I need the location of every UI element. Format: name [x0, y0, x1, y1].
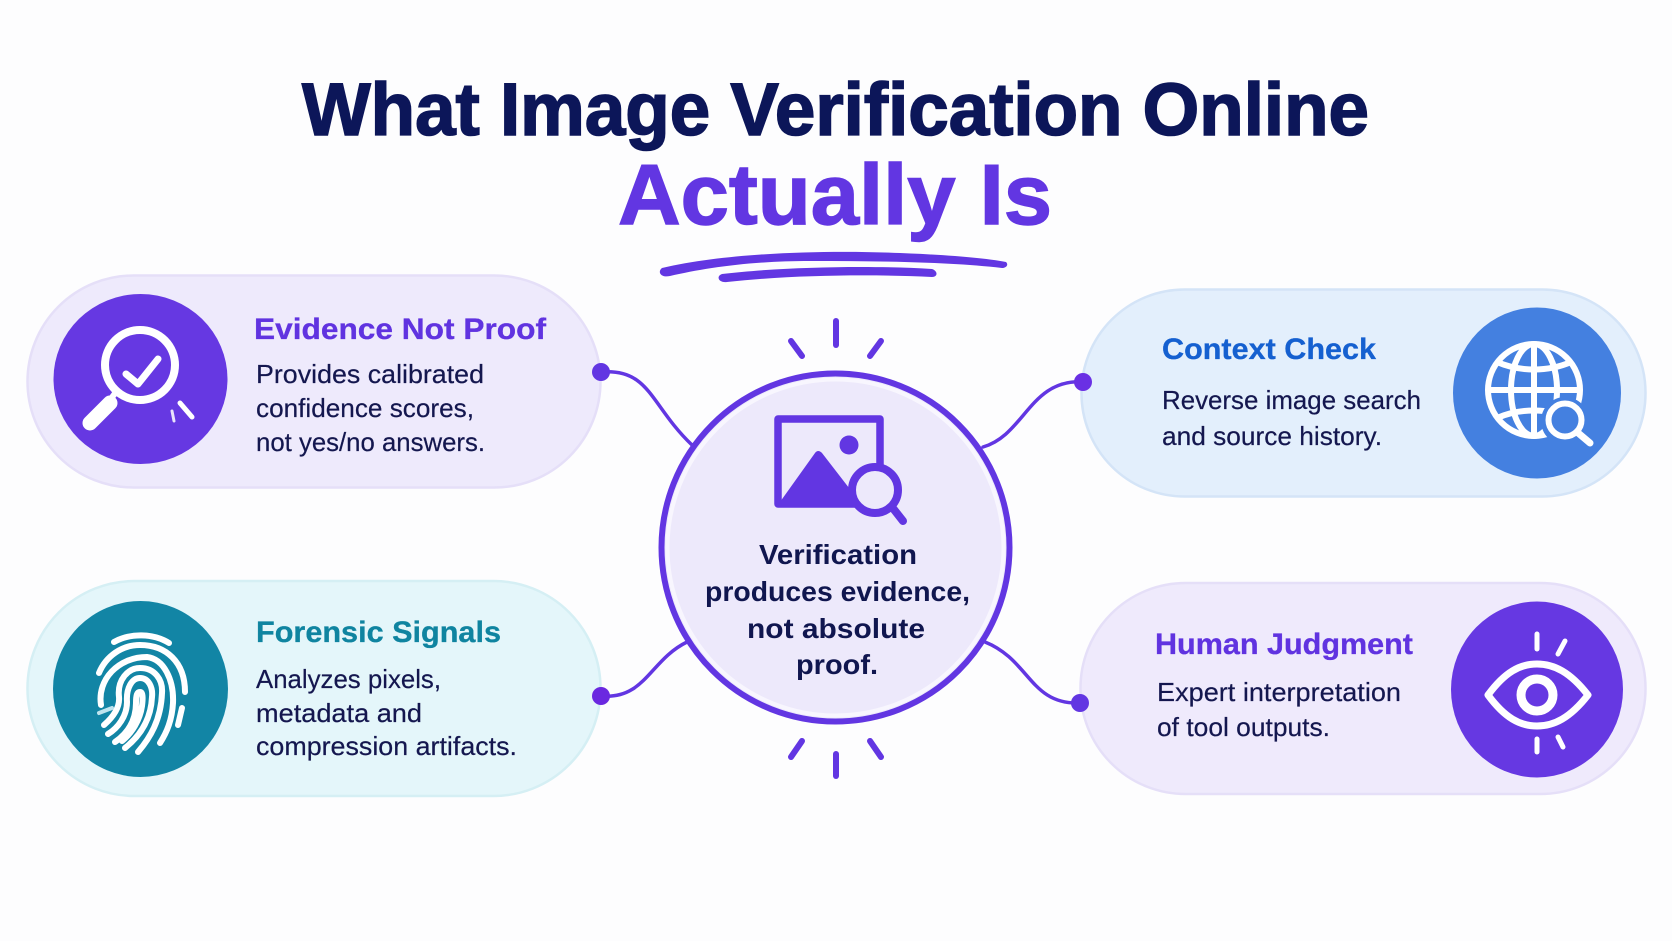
heading: Context Check — [1162, 333, 1376, 366]
title underline — [660, 252, 1007, 282]
hub text: produces evidence, — [705, 576, 970, 607]
panel: evidence not proof — [28, 276, 610, 488]
connector dot — [592, 363, 610, 381]
body text: and source history. — [1162, 421, 1382, 451]
panel: forensic signals — [28, 581, 610, 796]
body text — [1162, 385, 1421, 451]
body text: Provides calibrated — [256, 359, 484, 389]
title — [302, 68, 1369, 282]
body text: compression artifacts. — [256, 731, 517, 761]
hub text: not absolute — [747, 613, 925, 644]
hub text — [705, 539, 970, 680]
connectors — [601, 372, 1084, 703]
central hub — [662, 374, 1010, 722]
icon: eye — [1451, 602, 1623, 778]
title line 2: Actually Is — [618, 148, 1052, 243]
body text: not yes/no answers. — [256, 427, 485, 457]
connector dot — [592, 687, 610, 705]
body text — [1157, 677, 1401, 742]
panel: human judgment — [1071, 583, 1646, 794]
burst rays — [791, 321, 881, 776]
icon: image with magnifier — [778, 419, 903, 521]
hub text: Verification — [759, 539, 917, 570]
connector dot — [1074, 373, 1092, 391]
icon: globe with magnifier — [1453, 308, 1621, 478]
body text — [256, 664, 517, 761]
title line 1: What Image Verification Online — [302, 68, 1369, 151]
hub text: proof. — [796, 649, 878, 680]
heading: Forensic Signals — [256, 616, 501, 649]
panel: context check — [1074, 290, 1646, 496]
icon: fingerprint — [53, 601, 228, 777]
body text: Expert interpretation — [1157, 677, 1401, 707]
heading: Evidence Not Proof — [254, 313, 547, 346]
body text — [256, 359, 485, 457]
connector dot — [1071, 694, 1089, 712]
body text: Analyzes pixels, — [256, 664, 441, 694]
body text: metadata and — [256, 698, 422, 728]
body text: Reverse image search — [1162, 385, 1421, 415]
body text: confidence scores, — [256, 393, 474, 423]
icon: magnifier with check — [54, 294, 228, 464]
heading: Human Judgment — [1155, 628, 1413, 661]
body text: of tool outputs. — [1157, 712, 1330, 742]
